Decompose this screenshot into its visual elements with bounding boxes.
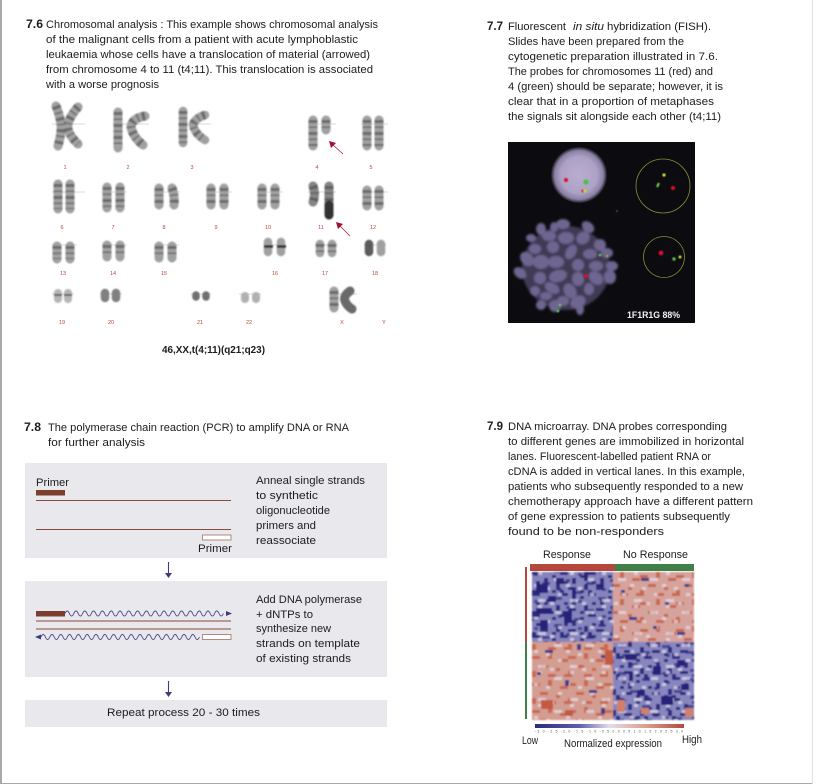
extension step text: strands on template bbox=[256, 638, 360, 650]
chromosome number labels: 1 bbox=[63, 165, 67, 171]
chromosome pair 19 bbox=[54, 293, 72, 299]
panel: 7.7 FISH caption: the signals sit alongside each other (t4;11) bbox=[508, 111, 721, 123]
extension step text: synthesize new bbox=[256, 623, 331, 635]
chromosome pair 2 bbox=[118, 112, 145, 148]
FISH result label: 1F1R1G 88% bbox=[627, 310, 681, 321]
panel: 7.9 microarray caption: found to be non-responders bbox=[508, 526, 665, 538]
chromosome pair 21 bbox=[196, 295, 206, 297]
panel: 7.8 PCR caption: 7.8 bbox=[24, 422, 42, 434]
panel: 7.9 microarray caption bbox=[487, 421, 753, 538]
arrow: extension to repeat bbox=[165, 681, 172, 697]
chromosome number labels: 7 bbox=[111, 225, 115, 231]
panel: repeat step bbox=[25, 700, 387, 727]
panel: 7.6 chromosomal analysis caption: 7.6 bbox=[26, 19, 43, 31]
chromosome number labels: 17 bbox=[322, 271, 328, 277]
upper primer bar bbox=[36, 611, 65, 616]
chromosome pair 3 bbox=[183, 111, 205, 143]
chromosome pair 9 bbox=[211, 188, 224, 205]
chromosome number labels: 6 bbox=[60, 225, 64, 231]
chromosome pair 13 bbox=[57, 246, 70, 259]
panel: 7.7 FISH caption: Fluorescent bbox=[508, 21, 566, 33]
chromosome number labels: 14 bbox=[110, 271, 116, 277]
panel: PCR anneal step bbox=[25, 463, 387, 558]
label: Response: Response bbox=[543, 549, 591, 561]
image: FISH micrograph bbox=[508, 142, 695, 323]
panel: 7.9 microarray caption: of gene expression to patients subsequently bbox=[508, 511, 731, 523]
anneal step text: oligonucleotide bbox=[256, 505, 330, 517]
chromosome pair 18 bbox=[369, 244, 381, 252]
chromosome number labels: 15 bbox=[161, 271, 167, 277]
anneal step text bbox=[256, 475, 366, 547]
panel: 7.7 FISH caption: 7.7 bbox=[487, 21, 503, 33]
chromosome number labels: 20 bbox=[108, 320, 114, 326]
colour scale ticks: -3.0 -2.5 -2.0 -1.5 -1.0 -0.5 0.0 0.5 1.0 1.5 2.0 2.5 3.0 bbox=[535, 730, 683, 734]
FISH signals bbox=[557, 173, 682, 312]
anneal step text: primers and bbox=[256, 520, 316, 532]
chromosome number labels: 16 bbox=[272, 271, 278, 277]
panel: 7.6 chromosomal analysis caption: Chromosomal analysis : This example shows chromosomal analysis bbox=[46, 19, 378, 31]
chromosome pair 10 bbox=[262, 188, 275, 205]
panel: 7.9 microarray caption: cDNA is added in vertical lanes. In this example, bbox=[508, 466, 745, 478]
chromosome number labels: 13 bbox=[60, 271, 66, 277]
extension step text: of existing strands bbox=[256, 653, 352, 665]
chart: microarray heatmap bbox=[522, 549, 702, 750]
chromosome pair 6 bbox=[58, 184, 70, 209]
panel: 7.8 PCR caption: for further analysis bbox=[48, 437, 146, 449]
chromosome pair 17 bbox=[320, 244, 332, 253]
chromosome number labels: 3 bbox=[190, 165, 194, 171]
panel: 7.7 FISH caption: clear that in a proportion of metaphases bbox=[508, 96, 715, 108]
panel: 7.6 chromosomal analysis caption: with a worse prognosis bbox=[45, 79, 159, 91]
anneal step text: to synthetic bbox=[256, 490, 319, 502]
panel: 7.9 microarray caption: chemotherapy approach have a different pattern bbox=[508, 496, 753, 508]
arrow: chromosome 4 bbox=[329, 141, 343, 154]
panel: 7.6 chromosomal analysis caption: of the malignant cells from a patient with acute lymphoblastic bbox=[46, 34, 359, 46]
panel: 7.6 chromosomal analysis caption: leukaemia whose cells have a translocation of material (arrowed) bbox=[46, 49, 370, 61]
chromosome pair 22 bbox=[245, 296, 256, 299]
interphase nucleus bbox=[551, 147, 607, 203]
chromosome pair 11 with translocation bbox=[313, 186, 329, 215]
label: No Response: No Response bbox=[623, 549, 688, 561]
chromosome number labels: 8 bbox=[162, 225, 166, 231]
panel: 7.9 microarray caption: DNA microarray. DNA probes corresponding bbox=[508, 421, 727, 433]
panel: 7.7 FISH caption: 4 (green) should be separate; however, it is bbox=[508, 81, 723, 93]
arrow: chromosome 11 bbox=[336, 222, 350, 236]
label: upper primer: Primer bbox=[36, 477, 69, 489]
panel: repeat step: Repeat process 20 - 30 times bbox=[107, 707, 261, 719]
panel: 7.8 PCR caption: The polymerase chain reaction (PCR) to amplify DNA or RNA bbox=[48, 422, 350, 434]
label: lower primer: Primer bbox=[198, 543, 232, 555]
panel: 7.6 chromosomal analysis caption: from chromosome 4 to 11 (t4;11). This translocation is associated bbox=[46, 64, 373, 76]
chromosome pair 1 bbox=[56, 106, 78, 146]
extension step text: Add DNA polymerase bbox=[256, 594, 362, 606]
lower new strand bbox=[35, 634, 199, 640]
top group bar bbox=[530, 564, 694, 571]
chromosome number labels: 22 bbox=[246, 320, 252, 326]
template strands bbox=[36, 621, 231, 629]
chromosome number labels: 5 bbox=[369, 165, 373, 171]
chromosome pair 12 bbox=[367, 190, 379, 206]
chromosome pair X bbox=[334, 291, 352, 309]
metaphase chromosome spread bbox=[511, 219, 618, 315]
chromosome number labels: 12 bbox=[370, 225, 376, 231]
label: Normalized expression: Normalized expression bbox=[564, 738, 662, 750]
chromosome number labels: 11 bbox=[318, 225, 324, 231]
chromosome pair 20 bbox=[105, 293, 116, 298]
chromosome number labels: 4 bbox=[315, 165, 319, 171]
karyotype formula: 46,XX,t(4;11)(q21;q23) bbox=[162, 344, 265, 356]
panel: 7.7 FISH caption: cytogenetic preparation illustrated in 7.6. bbox=[508, 51, 718, 63]
extension step text: + dNTPs to bbox=[256, 609, 313, 621]
heatmap cells bbox=[532, 572, 694, 720]
panel: PCR extension step bbox=[25, 581, 387, 677]
chart: karyotype bbox=[52, 106, 388, 356]
upper primer bar bbox=[36, 490, 65, 496]
chromosome number labels: 21 bbox=[197, 320, 203, 326]
panel: 7.6 chromosomal analysis caption bbox=[26, 19, 378, 91]
panel: 7.7 FISH caption: hybridization (FISH). bbox=[607, 21, 711, 33]
panel: 7.8 PCR caption bbox=[24, 422, 350, 449]
chromosome pair 16 bbox=[264, 242, 286, 252]
panel: 7.9 microarray caption: patients who subsequently responded to a new bbox=[508, 481, 743, 493]
label: High: High bbox=[682, 734, 702, 746]
colour scale bar bbox=[535, 724, 684, 728]
panel: 7.9 microarray caption: 7.9 bbox=[487, 421, 503, 433]
chromosome pair 5 bbox=[367, 120, 379, 146]
lower primer bar bbox=[202, 634, 231, 640]
chromosome number labels: 9 bbox=[214, 225, 218, 231]
yellow cell outline, lower bbox=[644, 236, 684, 278]
chromosome number labels: 18 bbox=[372, 271, 378, 277]
extension step text bbox=[256, 594, 362, 665]
chromosome number labels: Y bbox=[382, 320, 386, 326]
label: Low: Low bbox=[522, 735, 538, 747]
chromosome pair 8 bbox=[159, 188, 174, 205]
chromosome number labels: 10 bbox=[265, 225, 271, 231]
panel: 7.9 microarray caption: to different genes are immobilized in horizontal bbox=[508, 436, 744, 448]
panel: 7.7 FISH caption bbox=[487, 21, 723, 123]
anneal step text: Anneal single strands bbox=[256, 475, 366, 487]
upper new strand bbox=[65, 611, 232, 616]
DNA strands bbox=[36, 500, 231, 530]
chromosome number labels: 2 bbox=[126, 165, 130, 171]
panel: 7.7 FISH caption: in situ bbox=[573, 21, 604, 33]
lower primer bar bbox=[202, 535, 231, 540]
arrow: anneal to extension bbox=[165, 562, 172, 578]
chromosome pair 15 bbox=[159, 246, 172, 258]
anneal step text: reassociate bbox=[256, 535, 316, 547]
chromosome pair 14 bbox=[107, 245, 120, 257]
chromosome number labels bbox=[59, 165, 386, 326]
chromosome pair 4 bbox=[313, 120, 326, 146]
panel: 7.7 FISH caption: The probes for chromosomes 11 (red) and bbox=[508, 66, 713, 78]
left group bar bbox=[525, 567, 527, 719]
panel: 7.7 FISH caption: Slides have been prepared from the bbox=[508, 36, 684, 48]
chromosome number labels: 19 bbox=[59, 320, 65, 326]
chromosome pair 7 bbox=[107, 187, 120, 208]
chromosome number labels: X bbox=[340, 320, 344, 326]
panel: 7.9 microarray caption: lanes. Fluorescent-labelled patient RNA or bbox=[508, 451, 711, 463]
yellow cell outline, upper bbox=[636, 159, 690, 213]
